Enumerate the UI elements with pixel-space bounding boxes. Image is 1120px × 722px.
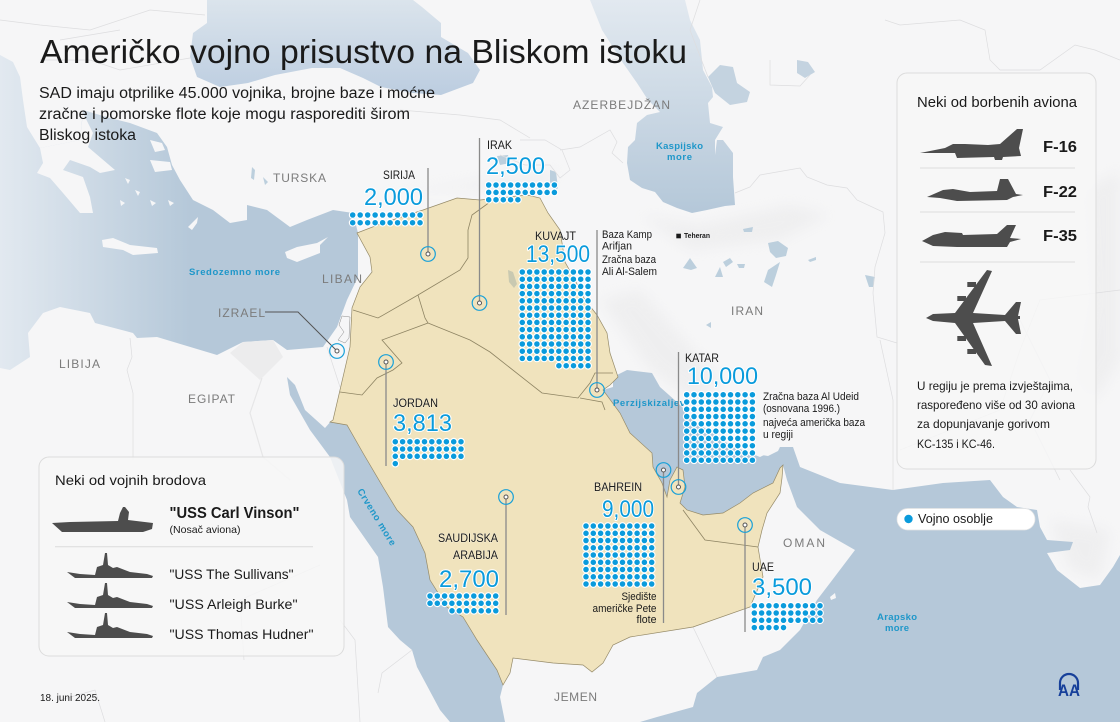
legend: military personnel (897, 508, 1035, 530)
callout: Izrael (218, 306, 344, 358)
callout: Katar: (osnovana 1996.) (763, 403, 840, 415)
callout: Kuvajt: Ali Al-Salem (602, 266, 657, 278)
icon: tanker aircraft (926, 270, 1021, 366)
Nile delta (230, 340, 283, 380)
sea labels: Arapsko (877, 612, 917, 623)
callout: Katar: Zračna baza Al Udeid (763, 391, 859, 403)
callout: UAE: 3,500 (752, 574, 812, 601)
sea labels: more (667, 152, 692, 163)
callout: Sirija: 2,000 (364, 184, 423, 211)
country labels: IRAN (731, 304, 763, 318)
icon: destroyer 1 (67, 553, 153, 578)
callout: Saudijska Arabija: ARABIJA (453, 550, 498, 562)
internal borders of the highlighted region (340, 202, 758, 547)
icon: F-22 silhouette (927, 179, 1023, 201)
panel heading: aircraft: Neki od borbenih aviona (917, 95, 1078, 111)
callout: Bahrein: 9,000 (602, 496, 654, 523)
country labels: LIBIJA (59, 357, 100, 371)
label: F-16: F-16 (1043, 139, 1077, 156)
logo: Anadolu Agency: AA (1058, 681, 1080, 700)
tanker note: KC-135 i KC-46. (917, 437, 995, 451)
panel heading: warships: Neki od vojnih brodova (55, 472, 206, 488)
callout: Katar: 10,000 (687, 363, 758, 390)
Caspian Sea (590, 0, 735, 213)
Aral and small lakes (708, 60, 815, 105)
callout: Kuvajt: Zračna baza (602, 254, 657, 266)
sea labels: Perzijskizaljev (613, 398, 686, 409)
callout: Saudijska Arabija: SAUDIJSKA (438, 533, 498, 545)
country labels (59, 97, 825, 704)
callout: Saudijska Arabija: 2,700 (439, 566, 499, 593)
Aegean islands, Crete, Cyprus (102, 140, 328, 262)
callout: Irak: 2,500 (486, 153, 545, 180)
sea labels (189, 141, 917, 634)
callout: Izrael: IZRAEL (218, 306, 265, 320)
callout: UAE: UAE (752, 562, 774, 574)
ship name: USS Arleigh Burke: "USS Arleigh Burke" (170, 596, 298, 612)
tanker note: raspoređeno više od 30 aviona (917, 398, 1075, 412)
subtitle: zračne i pomorske flote koje mogu rasporediti širom (39, 106, 410, 123)
ship name: USS Thomas Hudner: "USS Thomas Hudner" (170, 626, 314, 642)
Persian Gulf, Gulf of Oman and Arabian Sea (603, 370, 1120, 722)
callout: Jordan (379, 355, 461, 466)
sea labels: more (885, 623, 909, 634)
panel: fighter aircraft (897, 73, 1096, 469)
sea labels: Kaspijsko (656, 141, 703, 152)
country labels: TURSKA (273, 171, 326, 185)
callout: Bahrein: flote (636, 614, 656, 626)
callout: Bahrein: Sjedište (622, 591, 656, 603)
country labels: EGIPAT (188, 392, 236, 406)
Red Sea and Gulf of Suez (287, 377, 505, 722)
callout: Katar: KATAR (685, 353, 719, 365)
sea labels: Sredozemno more (189, 267, 280, 278)
callout: Bahrein (586, 463, 671, 626)
callout: Katar (671, 352, 866, 494)
panel: warships (39, 457, 344, 656)
callout: Katar: najveća američka baza (763, 417, 866, 429)
tanker note: U regiju je prema izvještajima, (917, 379, 1073, 393)
callout: Jordan: 3,813 (393, 410, 452, 437)
callout: Bahrein: BAHREIN (594, 482, 642, 494)
callout: Irak: IRAK (487, 140, 512, 152)
icon: F-16 silhouette (920, 129, 1023, 160)
label: F-35: F-35 (1043, 228, 1077, 245)
icon: aircraft carrier (52, 507, 153, 532)
icon: destroyer 3 (67, 613, 153, 638)
Qeshm and Sokotra-side islets (762, 447, 836, 600)
callout: Sirija (353, 168, 435, 261)
subtitle: SAD imaju otprilike 45.000 vojnika, brojne baze i moćne (39, 85, 435, 102)
icon: destroyer 2 (67, 583, 153, 608)
ship name: USS The Sullivans: "USS The Sullivans" (170, 566, 294, 582)
country labels: OMAN (783, 536, 825, 550)
title: Američko vojno prisustvo na Bliskom istoku (40, 33, 687, 70)
date: 18. juni 2025. (40, 693, 100, 704)
Saudi Arabia, Syria, Iraq, Jordan, Kuwait, Bahrain, Qatar, UAE highlighted region (330, 195, 783, 685)
callout: Kuvajt: Arifjan (602, 240, 632, 252)
country labels: JEMEN (554, 690, 597, 704)
callout: Kuvajt (522, 229, 657, 397)
ship name: USS Carl Vinson (170, 505, 300, 536)
callout: Katar: u regiji (763, 429, 793, 441)
subtitle: Bliskog istoka (39, 127, 136, 144)
sea labels: Crveno more (354, 487, 398, 548)
Black Sea (190, 0, 480, 95)
callout: Sirija: SIRIJA (383, 170, 415, 182)
logo: Anadolu Agency (1058, 674, 1080, 700)
city: Teheran: Teheran (684, 233, 710, 240)
callout: Irak (472, 138, 554, 310)
callout: Saudijska Arabija (430, 490, 513, 615)
callout: Jordan: JORDAN (393, 398, 438, 410)
Iraqi lake (508, 270, 517, 288)
Greece (37, 113, 115, 213)
ship name: USS Carl Vinson: "USS Carl Vinson" (170, 505, 300, 522)
country labels: LIBAN (322, 272, 362, 286)
ship name: USS Carl Vinson: (Nosač aviona) (170, 524, 240, 536)
tanker note: za dopunjavanje gorivom (917, 417, 1050, 431)
icon: F-35 silhouette (922, 225, 1021, 247)
subtitle (39, 85, 435, 144)
callout: Kuvajt: Baza Kamp (602, 229, 652, 241)
callout: Kuvajt: KUVAJT (535, 231, 576, 243)
tanker note (917, 379, 1075, 451)
country labels: AZERBEJDŽAN (573, 97, 670, 112)
callout: Kuvajt: 13,500 (526, 241, 590, 268)
label: F-22: F-22 (1043, 184, 1077, 201)
Israel and Palestine outline (338, 316, 350, 343)
legend: military personnel: Vojno osoblje (918, 511, 993, 526)
Mediterranean and Aegean sea (0, 55, 358, 370)
callout: UAE (738, 518, 820, 632)
callout: Bahrein: američke Pete (592, 603, 656, 615)
